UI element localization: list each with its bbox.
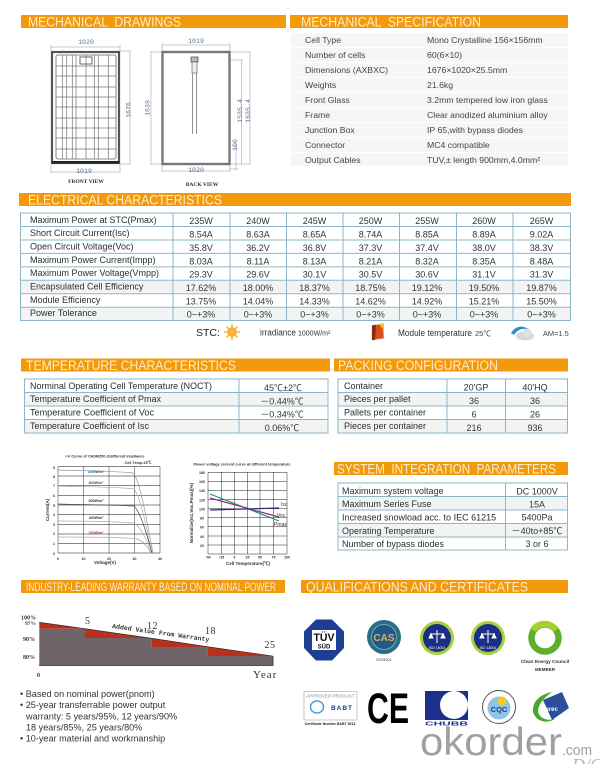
table: system integration parameters: －40to+85℃ (512, 526, 562, 536)
legend: standard test conditions: 1000W/m² (298, 330, 331, 338)
heading: mechanical drawings: MECHANICAL DRAWINGS (28, 14, 181, 30)
chart: I-V curves at different irradiance: 0 (57, 557, 59, 561)
chart: power voltage current at different temperature: 80 (200, 516, 204, 520)
icon: BABT approved product (304, 692, 357, 726)
table: electrical characteristics: 8.74A (359, 230, 382, 240)
table: mechanical specification: Clear anodized aluminium alloy (427, 110, 548, 120)
table: mechanical specification: IP 65,with bypass diodes (427, 125, 524, 135)
table: packing configuration: Pieces per container (344, 421, 426, 431)
table: system integration parameters: 3 or 6 (525, 539, 549, 549)
table: temperature characteristics (24, 379, 328, 433)
chart: power voltage current at different temperature: 100 (199, 508, 205, 512)
table: packing configuration: Container (344, 381, 383, 391)
table: electrical characteristics: 15.21% (469, 296, 499, 306)
icon: BABT approved product: Certificate Number BABT 9013 (305, 722, 355, 726)
table: mechanical specification: Weights (305, 80, 337, 90)
icon: Clean Energy Council ring: Clean Energy Council (521, 659, 569, 664)
table: temperature characteristics: 0.06%℃ (265, 423, 299, 433)
table: system integration parameters: DC 1000V (516, 486, 558, 496)
chart: I-V curves at different irradiance: 1000W/m² (88, 470, 105, 474)
chart: power voltage current at different temperature: Pmax (274, 522, 287, 528)
chart: I-V curves at different irradiance: 2 (53, 532, 55, 536)
icon: BABT approved product: BABT (331, 705, 353, 712)
heading: qualifications and certificates: QUALIFICATIONS AND CERTIFICATES (306, 580, 528, 594)
chart: warranty steps: 90% (23, 637, 35, 643)
table: temperature characteristics: 45℃±2℃ (264, 383, 302, 393)
chart: power voltage current at different temperature: 25 (246, 556, 250, 560)
table: electrical characteristics: Power Tolerance (30, 308, 97, 318)
chart: I-V curves at different irradiance: 40 (158, 557, 162, 561)
table: electrical characteristics: 19.12% (412, 283, 442, 293)
panel: back view drawing: BACK VIEW (186, 182, 219, 188)
table: system integration parameters: Increased snowload acc. to IEC 61215 (342, 512, 496, 522)
chart: I-V curves at different irradiance: 400W/m² (89, 516, 104, 520)
table: mechanical specification: Connector (305, 140, 345, 150)
chart: power voltage current at different temperature: 100 (284, 556, 290, 560)
table: electrical characteristics: 8.54A (189, 230, 213, 240)
table: electrical characteristics: 19.50% (469, 283, 499, 293)
chart: power voltage current at different temperature: 120 (199, 498, 205, 502)
chart: I-V curves at different irradiance: Current(A) (45, 498, 50, 521)
table: electrical characteristics: 31.3V (530, 270, 553, 280)
table: electrical characteristics: 0~+3% (244, 310, 272, 320)
table: electrical characteristics: Maximum Power Voltage(Vmpp) (30, 268, 159, 278)
table: electrical characteristics: Short Circuit Current(Isc) (30, 228, 130, 238)
table: system integration parameters: Number of bypass diodes (342, 539, 445, 549)
table: packing configuration: 26 (530, 410, 540, 420)
watermark: okorder.com: .com (562, 743, 592, 759)
table: electrical characteristics: 19.87% (526, 283, 557, 293)
table: electrical characteristics: 8.13A (303, 256, 326, 266)
table: electrical characteristics: 8.48A (530, 256, 553, 266)
panel: back view drawing: 1639 (144, 100, 152, 116)
table: mechanical specification: TUV,± length 900mm,4.0mm² (427, 155, 540, 165)
table: mechanical specification: Cell Type (305, 35, 341, 45)
table: electrical characteristics: 0~+3% (470, 310, 498, 320)
table: electrical characteristics: 14.92% (412, 296, 442, 306)
icon: CAS badge: ISO9001 (376, 657, 393, 662)
heading: warranty: INDUSTRY-LEADING WARRANTY BASED ON NOMINAL POWER (26, 580, 276, 594)
legend: standard test conditions: irradiance (260, 328, 296, 338)
chart: power voltage current at different temperature: Power voltage current curve at different temperature (193, 462, 291, 466)
table: system integration parameters (338, 483, 568, 550)
table: electrical characteristics: Module Efficiency (30, 295, 101, 305)
chart: power voltage current at different temperature: -25 (219, 556, 224, 560)
panel: back view drawing: 1020 (188, 167, 204, 174)
table: electrical characteristics: 255W (415, 216, 439, 226)
table: packing configuration: 40'HQ (522, 382, 548, 392)
table: mechanical specification: 3.2mm tempered low iron glass (427, 95, 548, 105)
icon: ISO 18001 badge: ISO 18001 (480, 646, 496, 650)
table: electrical characteristics: 31.1V (472, 270, 496, 280)
table: temperature characteristics: Temperature Coefficient of Isc (30, 421, 149, 431)
table: temperature characteristics: Temperature Coefficient of Voc (30, 408, 155, 418)
panel: front view drawing: 1020 (78, 39, 94, 46)
table: packing configuration: 20'GP (464, 382, 488, 392)
chart: warranty steps: 100% (21, 616, 36, 622)
table: electrical characteristics: 0~+3% (413, 310, 441, 320)
icon: module (372, 324, 384, 340)
text block: warranty notes: 18 years/85%, 25 years/80% (26, 722, 142, 732)
icon: CE mark: CE (367, 685, 409, 733)
icon: ISO 14001 badge: ISO 14001 (429, 646, 445, 650)
table: electrical characteristics: 8.03A (189, 256, 213, 266)
chart: I-V curves at different irradiance: 4 (53, 513, 55, 517)
chart: I-V curves at different irradiance: 200W/m² (89, 531, 104, 535)
table: mechanical specification: Front Glass (305, 95, 351, 105)
chart: power voltage current at different temperature: 60 (200, 526, 204, 530)
chart: warranty steps: Added Value From Warranty (112, 623, 210, 644)
chart: I-V curves at different irradiance (45, 454, 162, 565)
icon: ISO 14001 badge (420, 621, 454, 655)
table: mechanical specification: 60(6×10) (427, 50, 462, 60)
chart: power voltage current at different temperature: -50 (205, 556, 211, 560)
legend: standard test conditions: AM=1.5 (543, 329, 569, 338)
chart: I-V curves at different irradiance: 3 (53, 523, 55, 527)
table: electrical characteristics: 18.75% (355, 283, 386, 293)
table: packing configuration: 6 (471, 410, 477, 420)
table: packing configuration: Pieces per pallet (344, 394, 411, 404)
watermark: okorder.com: okorder (420, 721, 562, 764)
heading: packing configuration: PACKING CONFIGURATION (338, 358, 498, 373)
icon: TUV SUD badge: TÜV (314, 631, 335, 644)
table: electrical characteristics: 8.11A (247, 256, 269, 266)
panel: back view drawing: 1635.4 (245, 99, 252, 123)
table: electrical characteristics: 9.02A (530, 230, 553, 240)
text block: warranty notes (20, 689, 177, 744)
table: mechanical specification: Output Cables (305, 155, 361, 165)
table: electrical characteristics: 18.37% (299, 283, 330, 293)
table: electrical characteristics: 240W (246, 216, 270, 226)
chart: I-V curves at different irradiance: 5 (53, 504, 55, 508)
table: electrical characteristics: 8.85A (415, 230, 439, 240)
table: temperature characteristics: Temperature Coefficient of Pmax (30, 394, 161, 404)
table: electrical characteristics: 14.33% (299, 296, 330, 306)
table: electrical characteristics: 36.8V (303, 243, 326, 253)
chart: I-V curves at different irradiance: 600W/m² (89, 499, 104, 503)
table: electrical characteristics: 8.65A (303, 230, 326, 240)
chart: I-V curves at different irradiance: I-V Curve of CHSM250 @different irradiance (65, 454, 145, 458)
table: packing configuration: 36 (530, 396, 540, 406)
table: electrical characteristics: Maximum Power at STC(Pmax) (30, 215, 157, 225)
chart: power voltage current at different temperature: 180 (199, 471, 205, 475)
chart: warranty steps: 5 (85, 616, 90, 627)
icon: cloud (511, 327, 534, 340)
chart: I-V curves at different irradiance: 30 (132, 557, 136, 561)
table: electrical characteristics: 13.75% (186, 296, 216, 306)
chart: I-V curves at different irradiance: 0 (53, 552, 55, 556)
text block: warranty notes: warranty: 5 years/95%, 12 years/90% (25, 712, 177, 722)
icon: TUV SUD badge: SÜD (318, 644, 331, 650)
table: packing configuration: 36 (469, 396, 479, 406)
chart: power voltage current at different temperature: 0 (234, 556, 236, 560)
table: electrical characteristics: 8.63A (246, 230, 270, 240)
table: electrical characteristics: 38.3V (530, 243, 553, 253)
icon: CHUBB logo: CHUBB (425, 722, 468, 728)
table: electrical characteristics: 29.3V (189, 270, 213, 280)
chart: power voltage current at different temperature (189, 462, 291, 566)
icon: sun (224, 324, 240, 340)
chart: warranty steps: 18 (205, 626, 216, 637)
table: electrical characteristics: 15.50% (526, 296, 557, 306)
table: electrical characteristics: 30.1V (303, 270, 326, 280)
table: temperature characteristics: －0.34%℃ (260, 410, 304, 420)
table: electrical characteristics: 30.6V (415, 270, 439, 280)
chart: power voltage current at different temperature: Isc (281, 502, 288, 508)
chart: power voltage current at different temperature: 50 (258, 556, 262, 560)
chart: power voltage current at different temperature: Voc (277, 513, 286, 519)
table: packing configuration: 936 (527, 423, 543, 433)
text block: warranty notes: • 25-year transferrable power output (20, 700, 166, 710)
legend: standard test conditions (196, 324, 569, 340)
chart: I-V curves at different irradiance: 8 (53, 475, 55, 479)
heading: electrical characteristics: ELECTRICAL CHARACTERISTICS (28, 192, 222, 208)
chart: warranty steps: 12 (147, 621, 158, 632)
table: system integration parameters: 5400Pa (521, 512, 553, 522)
table: electrical characteristics: 38.0V (472, 243, 496, 253)
chart: power voltage current at different temperature: 75 (272, 556, 276, 560)
table: mechanical specification: Junction Box (305, 125, 355, 135)
table: electrical characteristics: 36.2V (246, 243, 270, 253)
table: mechanical specification: 1676×1020×25.5mm (427, 65, 507, 75)
icon: TUV SUD badge (304, 620, 344, 660)
text block: warranty notes: • 10-year material and workmanship (20, 734, 165, 744)
chart: power voltage current at different temperature: Normalize(Isc,Voc,Pmax)(%) (189, 482, 194, 543)
chart: warranty steps (21, 616, 277, 681)
table: electrical characteristics: 14.04% (243, 296, 273, 306)
table: packing configuration: 216 (466, 423, 482, 433)
icon: BABT approved product: APPROVED PRODUCT (306, 694, 355, 698)
legend: standard test conditions: Module temperature (398, 328, 472, 338)
table: electrical characteristics: Encapsulated Cell Efficiency (30, 282, 144, 292)
chart: warranty steps: 97% (25, 621, 36, 627)
table: electrical characteristics: 30.5V (359, 270, 382, 280)
panel: front view drawing: FRONT VIEW (68, 179, 104, 185)
icon: CQC badge (482, 690, 516, 724)
table: system integration parameters: Maximum system voltage (342, 486, 444, 496)
table: electrical characteristics: 37.4V (415, 243, 439, 253)
text block: warranty notes: • Based on nominal power(pnom) (20, 689, 155, 699)
table: mechanical specification: 21.6kg (427, 80, 453, 90)
table: electrical characteristics: 235W (189, 216, 213, 226)
table: system integration parameters: Maximum Series Fuse (342, 499, 432, 509)
chart: I-V curves at different irradiance: 20 (107, 557, 111, 561)
chart: warranty steps: 80% (23, 655, 35, 661)
heading: mechanical specification: MECHANICAL SPECIFICATION (301, 14, 481, 30)
table: electrical characteristics: 37.3V (359, 243, 382, 253)
table: electrical characteristics: 14.62% (355, 296, 386, 306)
chart: warranty steps: 0 (37, 673, 40, 679)
legend: standard test conditions: 25℃ (475, 329, 491, 338)
table: electrical characteristics: 250W (359, 216, 383, 226)
heading: mechanical drawings (21, 14, 286, 30)
table: electrical characteristics: 0~+3% (356, 310, 385, 320)
icon: ISO 18001 badge (471, 621, 505, 655)
heading: system integration parameters: SYSTEM INTEGRATION PARAMETERS (337, 462, 556, 476)
chart: power voltage current at different temperature: 40 (200, 535, 204, 539)
chart: warranty steps: Year (253, 669, 277, 681)
table: temperature characteristics: Norminal Operating Cell Temperature (NOCT) (30, 381, 212, 391)
panel: back view drawing: 1535.4 (237, 99, 244, 123)
panel: front view drawing (51, 39, 132, 185)
icon: CHUBB logo (425, 691, 468, 728)
table: electrical characteristics: 8.89A (472, 230, 496, 240)
panel: back view drawing (144, 38, 252, 188)
table: electrical characteristics: 265W (530, 216, 554, 226)
icon: CAS badge (367, 620, 401, 662)
table: electrical characteristics: 8.35A (472, 256, 496, 266)
heading: electrical characteristics (19, 192, 571, 208)
chart: warranty steps: 25 (264, 640, 276, 651)
table: system integration parameters: 15A (529, 500, 545, 510)
table: mechanical specification: Number of cells (305, 50, 366, 60)
legend: standard test conditions: STC: (196, 327, 220, 339)
icon: Conrec logo (533, 692, 569, 722)
chart: power voltage current at different temperature: Cell Temperature(℃) (226, 561, 270, 566)
chart: I-V curves at different irradiance: 9 (53, 466, 55, 470)
icon: Conrec logo: conrec (538, 707, 558, 713)
panel: back view drawing: 100 (232, 139, 239, 151)
panel: front view drawing: 1019 (76, 168, 92, 175)
chart: I-V curves at different irradiance: 7 (53, 484, 55, 488)
table: electrical characteristics: 260W (472, 216, 496, 226)
table: electrical characteristics: 0~+3% (527, 310, 556, 320)
table: electrical characteristics (20, 213, 570, 320)
chart: I-V curves at different irradiance: Voltage(V) (94, 560, 116, 565)
table: system integration parameters: Operating Temperature (342, 526, 434, 536)
table: electrical characteristics: 0~+3% (187, 310, 215, 320)
chart: I-V curves at different irradiance: 10 (82, 557, 86, 561)
chart: power voltage current at different temperature: 160 (199, 480, 205, 484)
table: packing configuration (338, 379, 568, 433)
icon: CAS badge: CAS (373, 633, 395, 644)
table: electrical characteristics: 18.00% (243, 283, 273, 293)
table: mechanical specification (291, 33, 568, 166)
table: electrical characteristics: 245W (303, 216, 327, 226)
chart: I-V curves at different irradiance: 800W/m² (89, 481, 104, 485)
panel: front view drawing: 1676 (126, 102, 132, 118)
table: mechanical specification: MC4 compatible (427, 140, 490, 150)
chart: I-V curves at different irradiance: Cell Temp.25℃ (125, 461, 152, 465)
table: electrical characteristics: Maximum Power Current(Impp) (30, 255, 156, 265)
chart: power voltage current at different temperature: 20 (200, 544, 204, 548)
table: mechanical specification: Dimensions (AXBXC) (305, 65, 388, 75)
table: electrical characteristics: 29.6V (246, 270, 270, 280)
table: electrical characteristics: 35.8V (189, 243, 213, 253)
table: mechanical specification: Frame (305, 110, 330, 120)
panel: back view drawing: 1019 (188, 38, 204, 45)
icon: Clean Energy Council ring (521, 624, 569, 672)
table: electrical characteristics: 8.21A (359, 256, 382, 266)
table: electrical characteristics: 0~+3% (300, 310, 329, 320)
icon: Clean Energy Council ring: MEMBER (535, 667, 556, 672)
table: electrical characteristics: 8.32A (415, 256, 439, 266)
table: electrical characteristics: Open Circuit Voltage(Voc) (30, 242, 134, 252)
table: temperature characteristics: －0.44%℃ (260, 396, 304, 406)
table: mechanical specification: Mono Crystalline 156×156mm (427, 35, 543, 45)
table: packing configuration: Pallets per container (344, 408, 426, 418)
chart: power voltage current at different temperature: 140 (199, 489, 205, 493)
chart: I-V curves at different irradiance: 6 (53, 494, 55, 498)
table: electrical characteristics: 17.62% (186, 283, 216, 293)
heading: temperature characteristics: TEMPERATURE CHARACTERISTICS (26, 358, 236, 373)
icon: CQC badge: CQC (491, 705, 508, 714)
chart: I-V curves at different irradiance: 1 (53, 542, 55, 546)
